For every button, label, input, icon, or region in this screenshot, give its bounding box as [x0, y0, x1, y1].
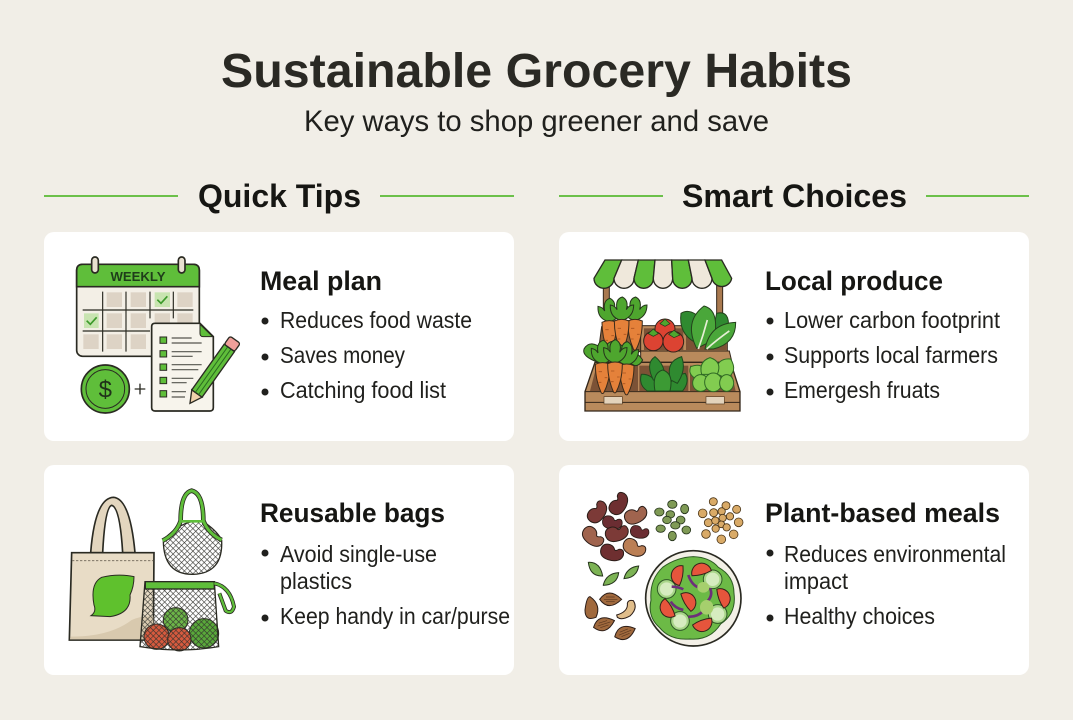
icon: calendar, checklist and coin: $ — [99, 376, 112, 403]
list: plant-based benefits: Healthy choices — [784, 603, 935, 629]
list: local produce benefits: Emergesh fruats — [784, 377, 940, 403]
list: reusable bag tips: Keep handy in car/purse — [280, 603, 510, 629]
list: meal plan benefits — [262, 307, 472, 403]
panel: plant-based meals — [559, 465, 1029, 675]
heading: Reusable bags: Reusable bags — [260, 498, 445, 528]
list: meal plan benefits: Catching food list — [280, 377, 447, 403]
list: local produce benefits: Lower carbon footprint — [784, 307, 1001, 333]
heading: Plant-based meals: Plant-based meals — [765, 498, 1000, 528]
list: reusable bag tips: Avoid single-use — [280, 541, 437, 567]
icon: produce stall — [584, 260, 740, 411]
list: local produce benefits — [766, 307, 1001, 403]
heading: Meal plan: Meal plan — [260, 266, 382, 296]
panel: meal plan — [44, 232, 514, 441]
list: reusable bag tips — [262, 541, 510, 629]
panel: local produce — [559, 232, 1029, 441]
list: meal plan benefits: Saves money — [280, 342, 405, 368]
list: plant-based benefits: Reduces environmental — [784, 541, 1006, 567]
list: meal plan benefits: Reduces food waste — [280, 307, 472, 333]
panel: reusable bags — [44, 465, 514, 675]
list: plant-based benefits — [766, 541, 1006, 629]
section heading: Quick Tips: Quick Tips — [198, 178, 361, 214]
list: reusable bag tips: plastics — [280, 568, 352, 594]
icon: calendar, checklist and coin — [77, 257, 240, 413]
list: local produce benefits: Supports local farmers — [784, 342, 998, 368]
icon: beans, nuts and salad — [579, 490, 743, 646]
subtitle: Key ways to shop greener and save — [304, 105, 769, 138]
icon: tote and mesh bags — [69, 491, 234, 651]
icon: calendar, checklist and coin: WEEKLY — [110, 270, 166, 284]
list: plant-based benefits: impact — [784, 568, 849, 594]
section heading: Smart Choices: Smart Choices — [682, 178, 907, 214]
title: Sustainable Grocery Habits — [221, 45, 852, 98]
heading: Local produce: Local produce — [765, 266, 943, 296]
